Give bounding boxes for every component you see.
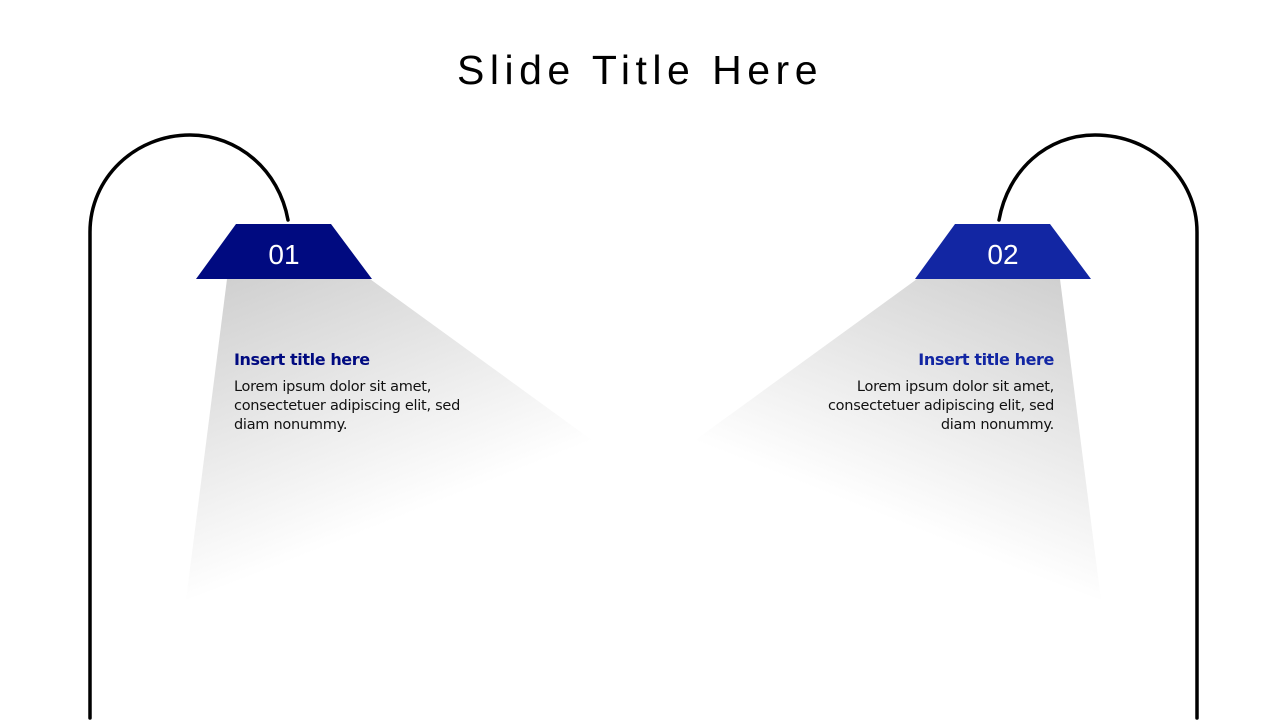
- heading 2: Insert title here: [918, 350, 1054, 369]
- body 1: [234, 379, 460, 433]
- light beam 1: [186, 279, 600, 600]
- body 2: diam nonummy.: [941, 417, 1054, 433]
- lamp shade 2: [915, 224, 1091, 279]
- number 02: 02: [987, 239, 1019, 270]
- light beam 2: [687, 279, 1101, 600]
- lamp post 1: [90, 135, 288, 718]
- lamp post 2: [999, 135, 1197, 718]
- body 1: Lorem ipsum dolor sit amet,: [234, 379, 431, 395]
- body 2: [828, 379, 1054, 433]
- number 01: 01: [268, 239, 300, 270]
- heading 1: Insert title here: [234, 350, 370, 369]
- lamp shade 1: [196, 224, 372, 279]
- text block 1: [234, 350, 460, 433]
- body 2: consectetuer adipiscing elit, sed: [828, 398, 1054, 414]
- title: Slide Title Here: [457, 47, 823, 93]
- body 1: consectetuer adipiscing elit, sed: [234, 398, 460, 414]
- body 2: Lorem ipsum dolor sit amet,: [857, 379, 1054, 395]
- body 1: diam nonummy.: [234, 417, 347, 433]
- text block 2: [828, 350, 1054, 433]
